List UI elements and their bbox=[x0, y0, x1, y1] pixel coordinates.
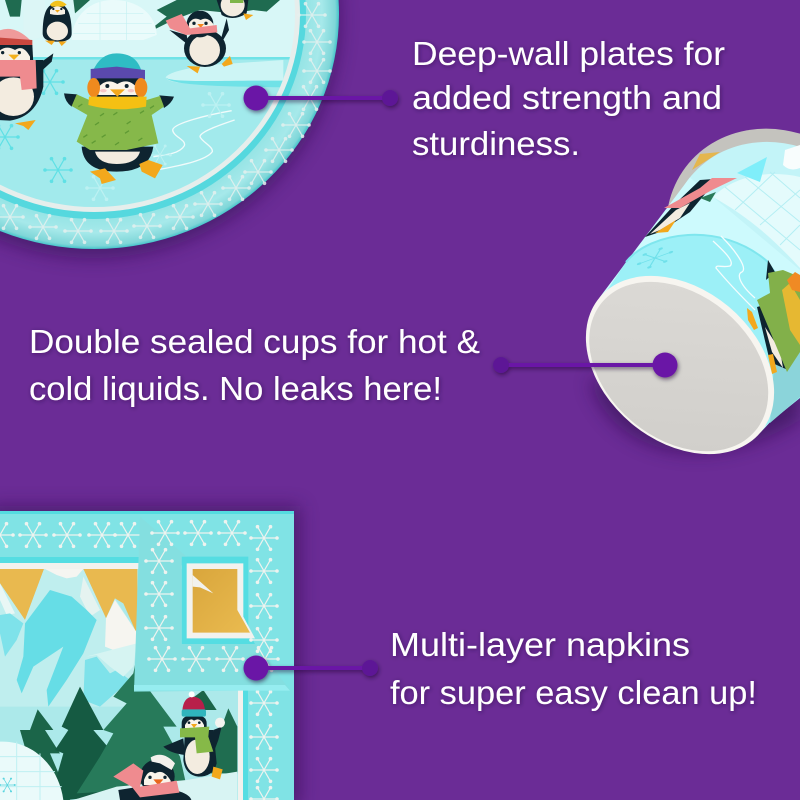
plate rim snowflakes bbox=[0, 2, 332, 244]
cup wall bbox=[593, 177, 800, 438]
snow ground bbox=[73, 772, 237, 800]
penguin: small yellow hat bbox=[43, 1, 72, 46]
plate centre scene bbox=[0, 0, 295, 207]
text block: plates bbox=[412, 35, 725, 162]
text block: napkins: Multi-layer napkins bbox=[390, 626, 690, 663]
cup mountain and snow bbox=[737, 157, 767, 182]
igloo bbox=[72, 0, 157, 40]
panel: paper cup bbox=[551, 83, 800, 491]
napkin scene panel bbox=[0, 557, 248, 800]
inner snowflakes bbox=[0, 69, 73, 183]
cup arc line bbox=[626, 235, 768, 262]
flap fold triangle bbox=[134, 517, 290, 692]
napkin base bbox=[0, 511, 294, 800]
cup bottom bbox=[551, 239, 800, 491]
cup shadow bbox=[590, 380, 800, 452]
napkin fold flap bbox=[134, 511, 294, 692]
top trees bbox=[73, 0, 280, 29]
igloo snowflake bbox=[0, 778, 16, 792]
cup bottom inner bbox=[556, 247, 800, 486]
cup side penguin bbox=[645, 178, 737, 237]
cup igloo bbox=[713, 174, 800, 268]
callout: napkin connector bbox=[244, 656, 378, 680]
polar bear bbox=[23, 0, 47, 39]
plate rim bbox=[0, 0, 339, 249]
napkin right strip snowflakes bbox=[249, 690, 279, 800]
gold sky bbox=[0, 569, 137, 635]
napkin shadow bbox=[0, 506, 300, 800]
text block: plates: added strength and bbox=[412, 79, 722, 116]
text block: cups bbox=[29, 323, 480, 407]
text block: plates: Deep-wall plates for bbox=[412, 35, 725, 72]
penguin: green scarf bbox=[163, 691, 225, 779]
flap gold bbox=[193, 569, 250, 633]
cup right shade bbox=[770, 340, 800, 423]
trees bbox=[3, 657, 237, 800]
panel: paper plate bbox=[0, 0, 340, 258]
ice island bbox=[166, 60, 284, 82]
flap frame white bbox=[187, 563, 255, 638]
penguin: left red hat bbox=[0, 29, 53, 130]
text block: cups: cold liquids. No leaks here! bbox=[29, 370, 442, 407]
plate shadow bbox=[0, 0, 340, 258]
mountains bbox=[0, 569, 137, 707]
callout: cup connector bbox=[493, 352, 678, 378]
igloo bbox=[0, 742, 63, 800]
callout: plate connector bbox=[244, 86, 398, 110]
text block: cups: Double sealed cups for hot & bbox=[29, 323, 480, 360]
penguin: main with green sweater bbox=[64, 53, 174, 184]
text block: plates: sturdiness. bbox=[412, 125, 580, 162]
plate white ring bbox=[0, 0, 300, 212]
flap snowflakes bbox=[144, 520, 280, 672]
panel: napkin bbox=[0, 506, 300, 800]
cup teal lower wall bbox=[602, 235, 800, 432]
cup bottom outer bbox=[551, 239, 800, 491]
napkin top snowflakes bbox=[0, 522, 143, 548]
flap corner bbox=[135, 511, 294, 692]
penguin: pink scarf right bbox=[166, 11, 233, 73]
napkin white edge bbox=[238, 692, 243, 800]
text block: napkins: for super easy clean up! bbox=[390, 674, 757, 711]
cup green penguin bbox=[747, 260, 800, 374]
penguin: pink scarf bbox=[113, 755, 192, 800]
cup rim bbox=[621, 83, 800, 396]
penguin: top right bbox=[217, 0, 253, 20]
flap frame teal bbox=[182, 557, 255, 644]
text block: napkins bbox=[390, 626, 757, 711]
skate trail bbox=[153, 111, 235, 169]
cup skate trail bbox=[713, 236, 755, 310]
cup snowflake bbox=[634, 244, 676, 272]
cup body bbox=[586, 83, 800, 438]
